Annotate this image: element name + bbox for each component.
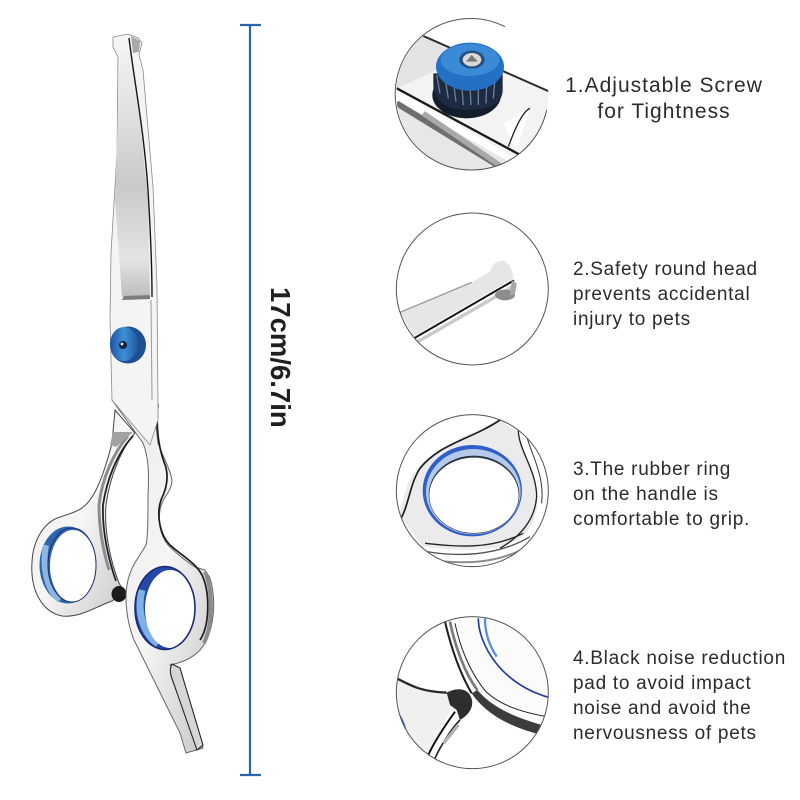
blade [110, 34, 158, 445]
callout text 2: prevents accidental [573, 284, 750, 305]
callout text 2: 2.Safety round head [573, 259, 758, 280]
right handle and tail [112, 400, 214, 753]
callout text 3: 3.The rubber ring [573, 459, 731, 480]
callout text 1: for Tightness [597, 100, 731, 123]
dimension line [240, 25, 261, 775]
callout text 4 [573, 648, 786, 744]
callout text 2 [573, 259, 758, 330]
callout circle: adjustable screw [395, 18, 557, 170]
scissors illustration [32, 34, 214, 753]
callout text 3: on the handle is [573, 484, 719, 505]
black noise reduction pad [112, 586, 126, 602]
dimension label: 17cm/6.7in [265, 287, 296, 428]
callout circle: safety round head [396, 213, 548, 365]
callout text 1: 1.Adjustable Screw [565, 74, 763, 97]
knurled screw head [432, 43, 504, 118]
callout text 4: nervousness of pets [573, 723, 757, 744]
callout text 1 [565, 74, 763, 123]
callout text 3: comfortable to grip. [573, 509, 750, 530]
callout text 4: pad to avoid impact [573, 673, 751, 694]
callout text 2: injury to pets [573, 309, 691, 330]
callout circle: black noise reduction pad [396, 610, 550, 769]
callout text 4: noise and avoid the [573, 698, 751, 719]
pivot screw [110, 326, 146, 364]
callout circle: rubber ring handle [396, 415, 548, 567]
callout text 4: 4.Black noise reduction [573, 648, 786, 669]
left handle with finger ring [32, 410, 135, 616]
callout text 3 [573, 459, 750, 530]
